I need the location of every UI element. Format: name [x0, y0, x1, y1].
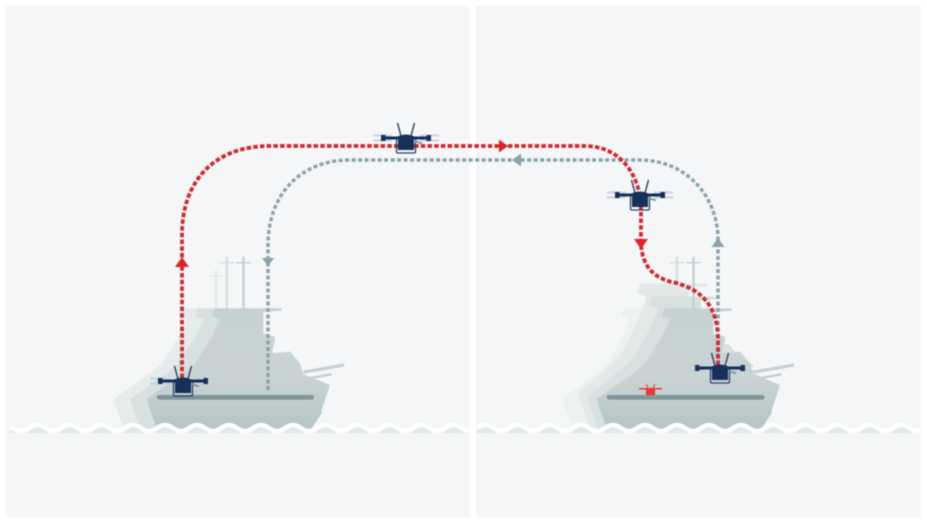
arrow: red right [499, 140, 508, 152]
drone: on left ship deck [150, 366, 216, 396]
waves: right [477, 425, 925, 433]
panel: right background [476, 6, 921, 517]
waves: left [10, 425, 477, 433]
red outbound flight path [182, 146, 718, 378]
ship deck: right [607, 395, 765, 400]
arrow: grey down [262, 258, 274, 266]
drone: top of flight path [373, 123, 439, 153]
ship: right, with motion ghosts [555, 257, 794, 432]
drone: descending [607, 180, 673, 210]
grey return flight path [268, 160, 718, 390]
drone: above right ship [687, 353, 753, 383]
panel: left background [6, 6, 470, 517]
arrow: red up [175, 257, 189, 267]
ship deck: left [157, 395, 314, 400]
arrow: red down [634, 239, 648, 249]
icon: small red drone on right ship deck [639, 384, 662, 395]
arrow: grey up [712, 238, 724, 247]
arrow: grey left [512, 154, 521, 166]
ship: left, with motion ghosts [113, 257, 344, 431]
